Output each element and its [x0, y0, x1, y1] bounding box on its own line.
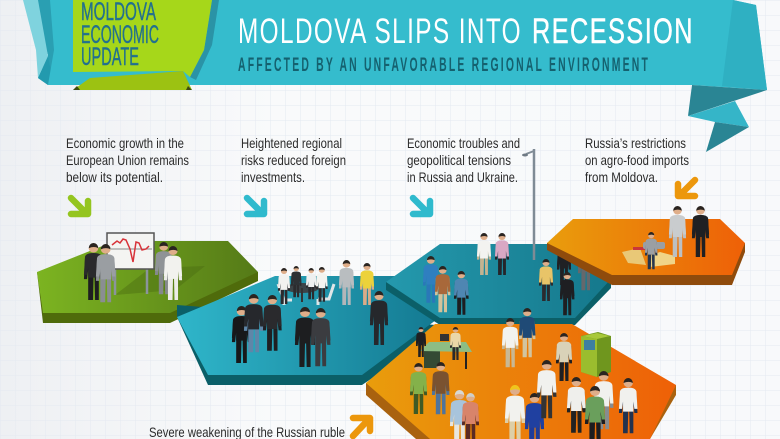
label text: UPDATE [81, 43, 139, 71]
title banner [23, 0, 767, 152]
text: Russia and Ukraine: geopolitical tensions [407, 152, 511, 168]
panel: blue hexagon centre [386, 149, 611, 325]
text: regional risks: Heightened regional [241, 135, 342, 151]
arrow: blue 2 [413, 198, 430, 214]
text: regional risks: investments. [241, 169, 305, 185]
text: Russia and Ukraine: in Russia and Ukraine. [407, 169, 518, 185]
desk [416, 327, 472, 369]
ATM [581, 332, 611, 377]
people presenting [84, 242, 182, 302]
banner left fold [23, 0, 60, 85]
people [410, 308, 637, 439]
text: EU growth: European Union remains [66, 152, 189, 168]
banner body [48, 0, 767, 90]
text: EU growth: Economic growth in the [66, 135, 184, 151]
lamp post [522, 149, 534, 260]
text: regional risks: risks reduced foreign [241, 152, 346, 168]
main title: RECESSION [532, 12, 694, 51]
label text: ECONOMIC [81, 21, 159, 49]
text: agro-food restrictions: on agro-food imports [585, 152, 689, 168]
arrow: orange down-left [678, 180, 695, 196]
chart board [107, 233, 154, 295]
text: Russia and Ukraine [407, 135, 520, 185]
text: EU growth [66, 135, 189, 185]
text: agro-food restrictions: Russia’s restrictions [585, 135, 686, 151]
label text [81, 0, 159, 71]
people [643, 206, 709, 269]
arrow: green [71, 198, 88, 214]
text: regional risks [241, 135, 346, 185]
meeting table group [278, 266, 334, 305]
people standing [423, 233, 593, 315]
text: agro-food restrictions [585, 135, 689, 185]
boxes [622, 247, 675, 267]
text: agro-food restrictions: from Moldova. [585, 169, 658, 185]
panel: blue hexagon left [177, 260, 436, 385]
main title: MOLDOVA SLIPS INTO [238, 12, 522, 51]
arrow: blue 1 [247, 198, 264, 214]
green label ribbon [73, 0, 219, 90]
text: EU growth: below its potential. [66, 169, 163, 185]
arrow: orange up-right [353, 418, 370, 436]
banner right fold [688, 0, 767, 152]
panel: green hexagon [37, 233, 258, 323]
panel: orange hexagon large [366, 308, 676, 439]
standing people [232, 260, 388, 367]
text: Russia and Ukraine: Economic troubles and [407, 135, 520, 151]
panel: orange hexagon top [547, 206, 745, 285]
